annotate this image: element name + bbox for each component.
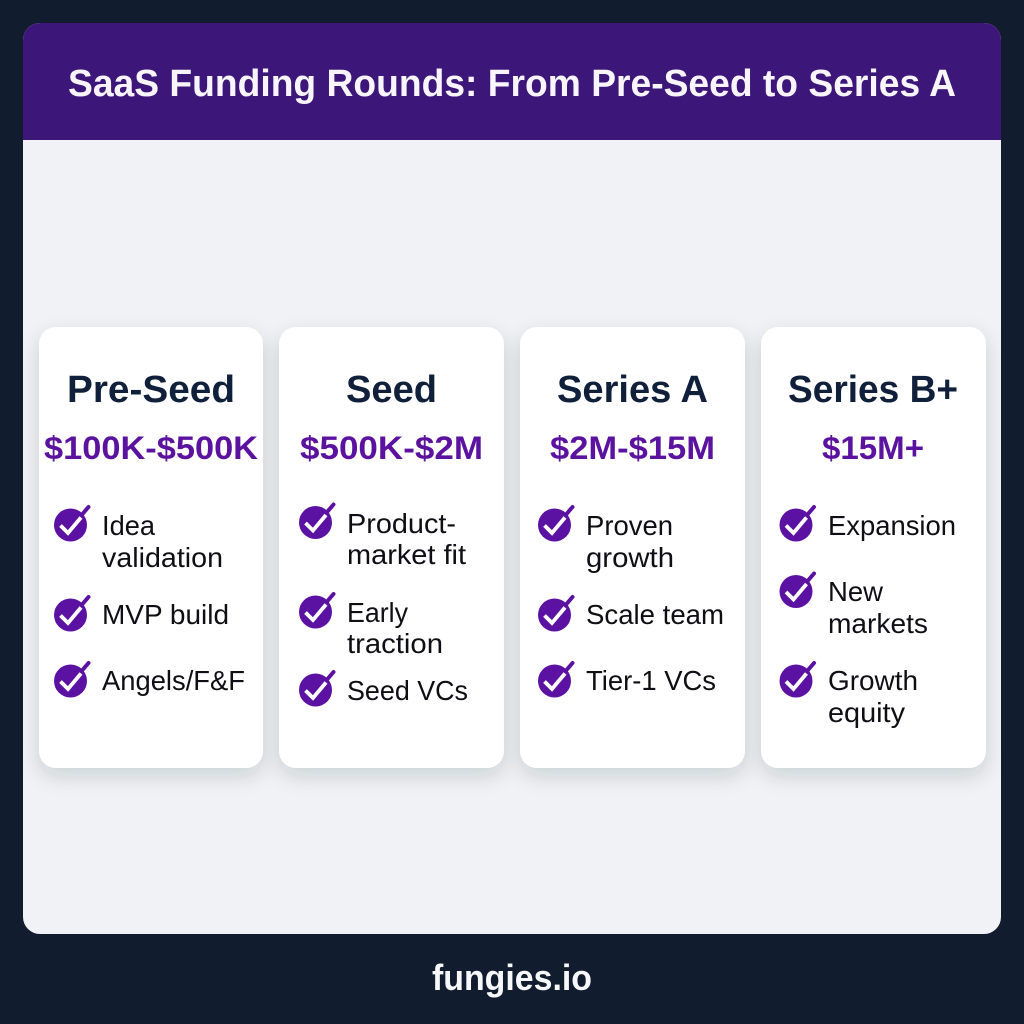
item: Proven growth [586, 510, 674, 573]
amount: $500K-$2M: $500K-$2M [300, 430, 483, 466]
icon: check [780, 574, 814, 608]
item: Product-market fit: market fit [347, 539, 466, 570]
icon: check [538, 663, 572, 698]
panel: Series A [520, 327, 745, 768]
item: Early traction: Early [347, 597, 408, 628]
item: Idea validation: validation [102, 542, 223, 573]
icon: check [538, 597, 572, 632]
item: Product-market fit: Product- [347, 508, 456, 539]
item: Angels/F&F: Angels/F&F [102, 665, 245, 696]
item: Tier-1 VCs: Tier-1 VCs [586, 665, 716, 696]
amount: $15M+: $15M+ [822, 430, 924, 466]
icon: check [299, 594, 334, 628]
panel: Seed [279, 327, 504, 768]
item: Proven growth: growth [586, 542, 674, 573]
item: MVP build: MVP build [102, 599, 229, 630]
item: Early traction: traction [347, 628, 443, 659]
item: Scale team: Scale team [586, 599, 724, 630]
item: New markets [828, 576, 928, 639]
footer brand: fungies.io [432, 957, 592, 998]
panel: Series B+ [761, 327, 986, 768]
icon: check [54, 597, 88, 632]
item: Expansion: Expansion [828, 510, 956, 541]
icon: check [54, 663, 88, 698]
heading: Pre-Seed: Pre-Seed [67, 369, 235, 411]
icon: check [780, 663, 814, 698]
amount: $100K-$500K: $100K-$500K [44, 430, 258, 466]
title: SaaS Funding Rounds: From Pre-Seed to Series A [68, 63, 956, 105]
item: Seed VCs: Seed VCs [347, 675, 468, 706]
icon: check [299, 504, 334, 539]
heading: Seed: Seed [346, 369, 437, 411]
heading: Series B+: Series B+ [788, 369, 958, 411]
item: New markets: New [828, 576, 884, 607]
icon: check [780, 507, 814, 542]
item: Idea validation: Idea [102, 510, 155, 541]
item: Early traction [347, 597, 443, 659]
item: Product-market fit [347, 508, 466, 570]
item: Proven growth: Proven [586, 510, 673, 541]
item: Growth equity: equity [828, 697, 905, 728]
icon: check [299, 672, 334, 706]
panel: Pre-Seed [39, 327, 263, 768]
heading: Series A: Series A [557, 369, 708, 411]
item: Idea validation [102, 510, 223, 573]
header band [23, 23, 1001, 140]
item: Growth equity: Growth [828, 665, 918, 696]
item: Growth equity [828, 665, 918, 728]
item: New markets: markets [828, 608, 928, 639]
amount: $2M-$15M: $2M-$15M [550, 430, 715, 466]
icon: check [54, 507, 88, 542]
icon: check [538, 507, 572, 542]
